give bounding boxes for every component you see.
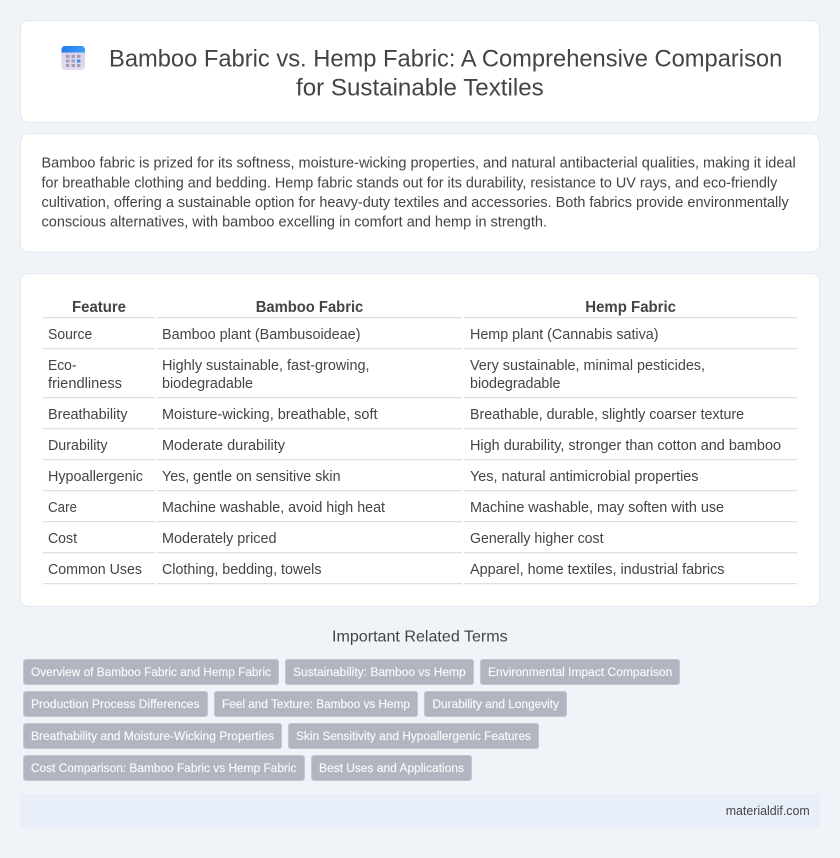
table row: eco-friendliness [43,358,797,398]
table row: durability: Durability [48,438,108,454]
table row: source: Hemp plant (Cannabis sativa) [470,327,658,343]
title: Bamboo Fabric vs. Hemp Fabric: A Comprehensive Comparison [109,46,782,73]
chip [286,660,474,684]
chip: Environmental Impact Comparison [488,665,672,679]
table row: breathability [43,407,797,429]
table row: source [43,327,797,349]
table row: breathability: Breathability [48,407,128,423]
table row: eco-friendliness: biodegradable [162,376,253,392]
heading: related terms: Important Related Terms [332,629,508,646]
table row: common uses: Clothing, bedding, towels [162,562,322,578]
text block: summary: conscious alternatives, with bamboo excelling in comfort and hemp in strength. [42,214,547,230]
footer: materialdif.com [726,803,810,818]
table header: Feature [72,299,126,316]
chip [424,692,566,716]
chip [480,660,680,684]
table row: eco-friendliness: Eco- [48,358,77,374]
table row: eco-friendliness: Very sustainable, minimal pesticides, [470,358,705,374]
text block: summary: for breathable clothing and bedding. Hemp fabric stands out for its durability, resistance to UV rays, and eco-friendly [42,175,778,191]
table row: cost: Moderately priced [162,531,276,547]
title: for Sustainable Textiles [296,75,544,102]
footer [20,794,820,828]
chip: Best Uses and Applications [319,761,464,775]
table row: care: Machine washable, may soften with use [470,500,724,516]
table row: source: Bamboo plant (Bambusoideae) [162,327,360,343]
text block: summary [42,156,796,230]
table row: eco-friendliness: friendliness [48,376,122,392]
panel: summary paragraph [20,134,820,252]
table row: eco-friendliness: Highly sustainable, fast-growing, [162,358,370,374]
table row: source: Source [48,327,92,343]
table header: Hemp Fabric [585,299,676,316]
table row: care [43,500,797,522]
chip [288,724,538,748]
chip [214,692,418,716]
table row: care: Care [48,500,77,516]
chip: Cost Comparison: Bamboo Fabric vs Hemp Fabric [31,761,296,775]
table row: eco-friendliness: biodegradable [470,376,560,392]
chip [24,724,282,748]
panel: comparison table [20,274,820,606]
icon: calendar [62,46,85,70]
table row: breathability: Moisture-wicking, breathable, soft [162,407,378,423]
table row: durability: High durability, stronger than cotton and bamboo [470,438,781,454]
chip: Overview of Bamboo Fabric and Hemp Fabric [31,665,271,679]
table row: cost [43,531,797,553]
text block: summary: Bamboo fabric is prized for its softness, moisture-wicking properties, and natural antibacterial qualities, making it ideal [42,156,796,172]
panel: title card [20,20,820,122]
text block: summary: cultivation, offering a sustainable option for heavy-duty textiles and accessories. Both fabrics provide environmentally [42,195,790,211]
chip [312,756,472,780]
chip: Production Process Differences [31,697,200,711]
chip: Durability and Longevity [432,697,560,711]
table row: care: Machine washable, avoid high heat [162,500,385,516]
table row: cost: Generally higher cost [470,531,604,547]
chip [24,756,304,780]
table row: breathability: Breathable, durable, slightly coarser texture [470,407,744,423]
table row: common uses [43,562,797,584]
table row: hypoallergenic: Hypoallergenic [48,469,143,485]
table row: durability [43,438,797,460]
chip: Feel and Texture: Bamboo vs Hemp [222,697,410,711]
table row: common uses: Common Uses [48,562,142,578]
table row: cost: Cost [48,531,77,547]
table row: hypoallergenic: Yes, natural antimicrobial properties [470,469,698,485]
table row: hypoallergenic: Yes, gentle on sensitive skin [162,469,340,485]
table header: Bamboo Fabric [256,299,363,316]
chip: Breathability and Moisture-Wicking Properties [31,729,274,743]
related terms chips [24,660,680,780]
chip [24,660,278,684]
table row: hypoallergenic [43,469,797,491]
chip [24,692,208,716]
table row: common uses: Apparel, home textiles, industrial fabrics [470,562,724,578]
chip: Skin Sensitivity and Hypoallergenic Features [296,729,531,743]
table row: durability: Moderate durability [162,438,286,454]
table header [43,299,797,318]
title [109,46,782,102]
chip: Sustainability: Bamboo vs Hemp [293,665,466,679]
